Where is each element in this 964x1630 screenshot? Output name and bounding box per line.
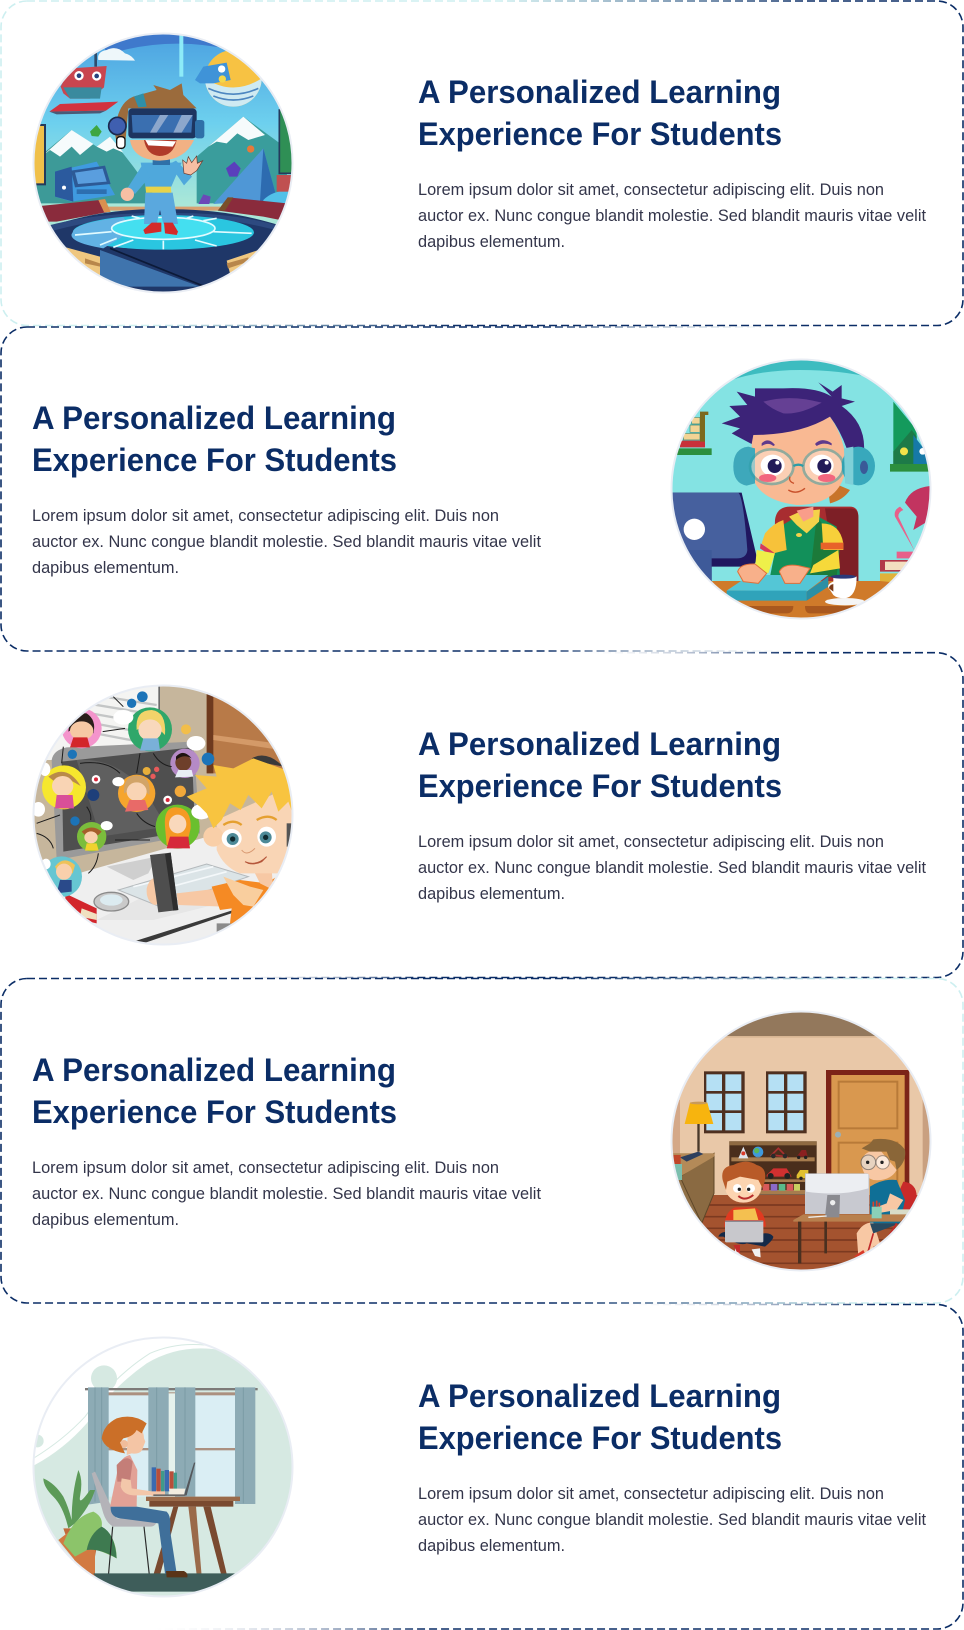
- body text 4: [32, 1159, 541, 1229]
- body text 1: Lorem ipsum dolor sit amet, consectetur adipiscing elit. Duis non: [418, 181, 884, 199]
- body text 3: dapibus elementum.: [418, 885, 565, 903]
- body text 1: [418, 181, 926, 251]
- panel: card 1: [1, 1, 963, 326]
- body text 1: dapibus elementum.: [418, 233, 565, 251]
- heading 5: [418, 1378, 782, 1456]
- books and laptop: [152, 1467, 156, 1491]
- heading 3: Experience For Students: [418, 768, 782, 804]
- body text 4: Lorem ipsum dolor sit amet, consectetur adipiscing elit. Duis non: [32, 1159, 499, 1177]
- heading 5: Experience For Students: [418, 1420, 782, 1456]
- heading 2: Experience For Students: [32, 442, 397, 478]
- heading 5: A Personalized Learning: [418, 1378, 781, 1414]
- illustration: boy with VR headset: [30, 30, 297, 300]
- panel: card 4: [1, 978, 963, 1303]
- body text 2: auctor ex. Nunc congue blandit molestie. Sed blandit mauris vitae velit: [32, 533, 541, 551]
- body text 2: Lorem ipsum dolor sit amet, consectetur adipiscing elit. Duis non: [32, 507, 499, 525]
- body text 5: dapibus elementum.: [418, 1537, 565, 1555]
- heading 3: [418, 726, 782, 804]
- body text 5: auctor ex. Nunc congue blandit molestie. Sed blandit mauris vitae velit: [418, 1511, 926, 1529]
- person: [111, 1507, 177, 1573]
- boy: [212, 877, 277, 927]
- body text 4: dapibus elementum.: [32, 1211, 179, 1229]
- card 2 dashed border: [1, 327, 963, 651]
- body text 3: auctor ex. Nunc congue blandit molestie. Sed blandit mauris vitae velit: [418, 859, 926, 877]
- heading 1: Experience For Students: [418, 116, 782, 152]
- heading 2: [32, 400, 397, 478]
- body text 2: [32, 507, 541, 577]
- illustration: student at desk by a window: [30, 1333, 297, 1600]
- body text 3: Lorem ipsum dolor sit amet, consectetur adipiscing elit. Duis non: [418, 833, 884, 851]
- table: [146, 1497, 240, 1501]
- body text 5: Lorem ipsum dolor sit amet, consectetur adipiscing elit. Duis non: [418, 1485, 884, 1503]
- heading 2: A Personalized Learning: [32, 400, 396, 436]
- head: [126, 1430, 146, 1455]
- body text 5: [418, 1485, 926, 1555]
- illustration: boy on video call with classmates: [30, 683, 297, 950]
- heading 1: [418, 74, 782, 152]
- panel: card 5: [1, 1304, 963, 1629]
- body text 3: [418, 833, 926, 903]
- card 3 dashed border: [1, 653, 963, 978]
- body text 4: auctor ex. Nunc congue blandit molestie. Sed blandit mauris vitae velit: [32, 1185, 541, 1203]
- card 5 dashed border: [1, 1304, 963, 1629]
- panel: card 2: [1, 327, 963, 651]
- illustration: two kids studying in a room: [667, 1007, 937, 1282]
- chair: [92, 1472, 157, 1527]
- illustration: boy with headphones at computer: [667, 353, 937, 623]
- heading 4: [32, 1052, 397, 1130]
- heading 3: A Personalized Learning: [418, 726, 781, 762]
- heading 4: A Personalized Learning: [32, 1052, 396, 1088]
- boy: [144, 193, 178, 224]
- body text 2: dapibus elementum.: [32, 559, 179, 577]
- heading 1: A Personalized Learning: [418, 74, 781, 110]
- phone and hand: [146, 878, 158, 905]
- panel: card 3: [1, 653, 963, 978]
- reaction icons: [137, 691, 148, 702]
- body text 1: auctor ex. Nunc congue blandit molestie. Sed blandit mauris vitae velit: [418, 207, 926, 225]
- boy head: [829, 486, 850, 504]
- heading 4: Experience For Students: [32, 1094, 397, 1130]
- card 4 dashed border: [1, 978, 963, 1303]
- classmate bubbles: [62, 708, 102, 748]
- card 1 dashed border: [1, 1, 963, 326]
